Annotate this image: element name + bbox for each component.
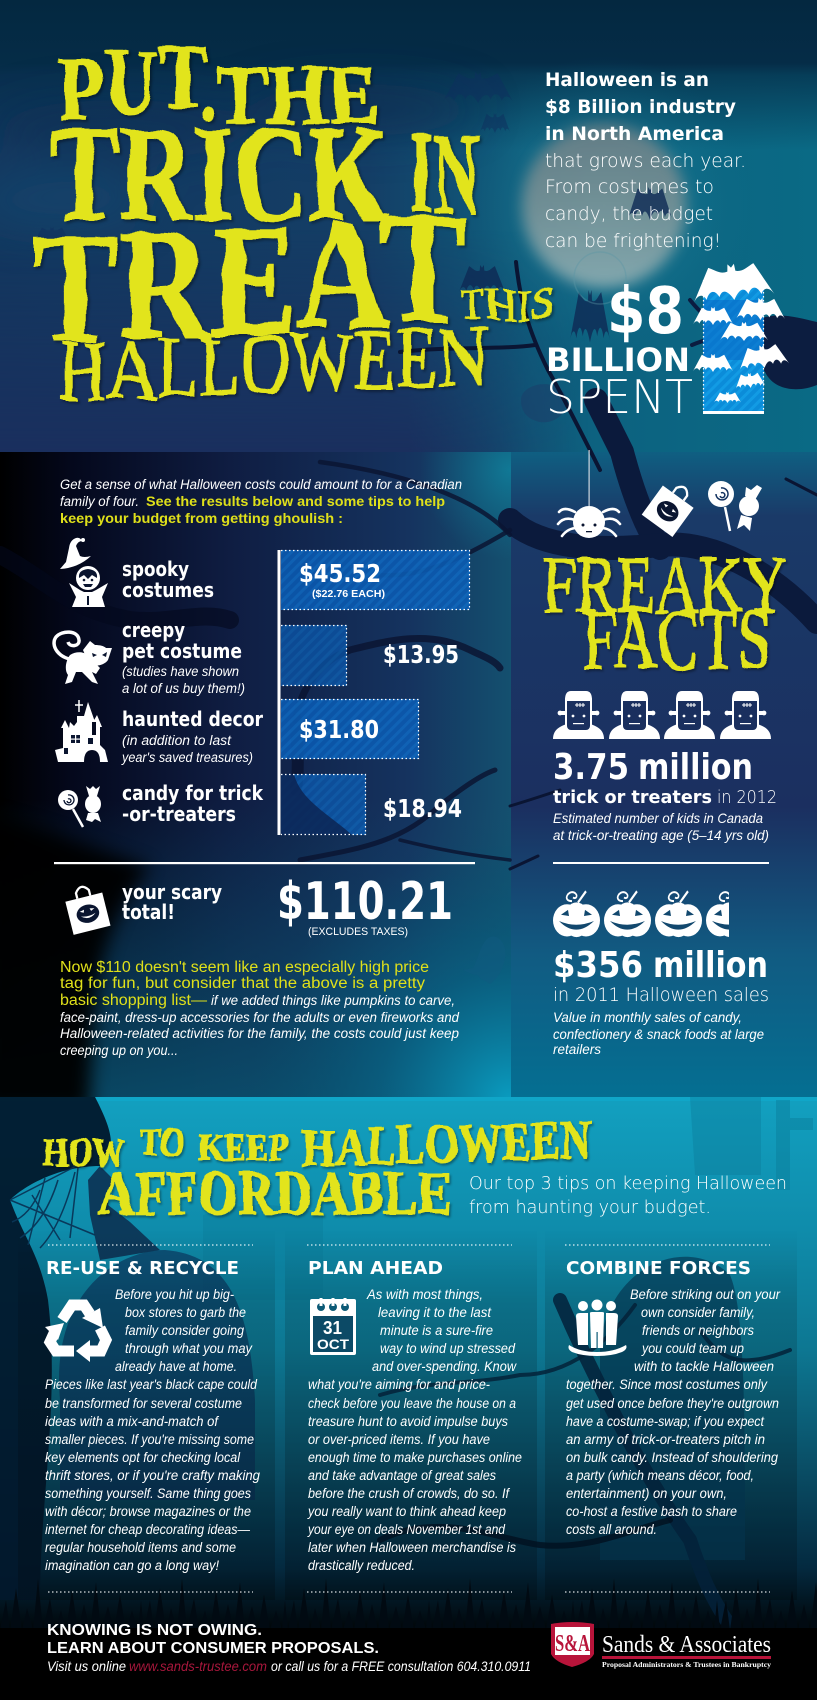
category: creepy pet costume: (studies have shown (122, 664, 239, 679)
column: combine forces (566, 1258, 780, 1537)
total: your scary total (122, 872, 453, 938)
total: your scary total: your scary (122, 880, 222, 904)
text: recycle tip: internet for cheap decorating ideas— (45, 1522, 250, 1537)
text: recycle tip: imagination can go a long way! (45, 1558, 219, 1573)
stat: 3.75 million trick or treaters: trick or treaters (553, 787, 712, 808)
stat: 3.75 million trick or treaters: million (638, 747, 753, 788)
logo: Sands and Associates: Proposal Administrators & Trustees in Bankruptcy (602, 1660, 771, 1669)
category: haunted decor (121, 707, 263, 765)
text: combine forces tip: together. Since most costumes only (566, 1377, 768, 1392)
panel: freaky facts background (511, 452, 817, 1097)
text: plan ahead tip: you really want to think ahead keep (307, 1504, 506, 1519)
total: your scary total: (EXCLUDES TAXES) (308, 926, 408, 938)
text: recycle tip: family consider going (125, 1323, 244, 1338)
bar: costumes: $45.52 (299, 559, 381, 588)
background: night sky header (0, 0, 817, 452)
category: spooky costumes (122, 557, 214, 602)
text: plan ahead tip: and over-spending. Know (372, 1359, 517, 1374)
column: plan ahead (307, 1258, 522, 1573)
text block: cost intro: family of four. (60, 494, 139, 509)
heading: re-use and recycle: RE-USE & RECYCLE (46, 1258, 239, 1279)
heading: How to keep Halloween affordable: HALLOWEEN (302, 1109, 591, 1178)
icon row: Frankenstein kids (553, 691, 771, 739)
text: plan ahead tip: later when Halloween merchandise is (308, 1540, 516, 1555)
text: recycle tip: regular household items and some (45, 1540, 236, 1555)
text: recycle tip: through what you may (125, 1341, 253, 1356)
text: plan ahead tip: As with most things, (366, 1287, 483, 1302)
bar chart: cost per category (278, 550, 470, 835)
bar: candy: $18.94 (383, 794, 462, 823)
text: plan ahead tip: check before you leave the house on a (308, 1396, 516, 1411)
icon: faint ghost (463, 936, 506, 984)
text: plan ahead tip: what you're aiming for and price- (308, 1377, 490, 1392)
text: combine forces tip: on bulk candy. Instead of shouldering (566, 1450, 778, 1465)
title: Put the Trick in Treat this Halloween: IN (409, 108, 479, 239)
heading: plan ahead: PLAN AHEAD (308, 1258, 443, 1279)
text block: cost intro: keep your budget from getting ghoulish : (60, 511, 343, 526)
icon: shopping bag (63, 882, 110, 935)
text: combine forces tip: own consider family, (641, 1305, 755, 1320)
bar: decor: $31.80 (299, 715, 379, 744)
title: Put the Trick in Treat this Halloween: HALLOWEEN (58, 308, 487, 419)
text: recycle tip: key elements opt for checking local (45, 1450, 241, 1465)
text block: Halloween industry intro: Halloween is an (545, 69, 709, 91)
category: candy (122, 781, 264, 826)
text block: price commentary (60, 959, 459, 1058)
panel: cost breakdown background (0, 452, 511, 1112)
stat: $8 billion spent with bats: $8 (607, 275, 684, 349)
stat: $356 million in sales: confectionery & snack foods at large (553, 1026, 764, 1042)
stat: $356 million in sales (553, 945, 769, 1057)
text: plan ahead tip: and take advantage of great sales (308, 1468, 496, 1483)
logo: Sands and Associates: Sands & Associates (602, 1632, 771, 1658)
category: creepy pet costume (122, 618, 245, 696)
text: combine forces tip: an army of trick-or-treaters pitch in (566, 1432, 765, 1447)
stat: 3.75 million trick or treaters (553, 747, 777, 843)
heading: Freaky Facts (542, 539, 787, 687)
category: creepy pet costume: pet costume (122, 639, 242, 663)
text: recycle tip: thrift stores, or if you're crafty making (45, 1468, 260, 1483)
text block: Halloween industry intro: in North America (545, 123, 724, 145)
text: combine forces tip: get used once before they're outgrown (566, 1396, 779, 1411)
text block: tips intro (469, 1173, 787, 1218)
text: recycle tip (45, 1287, 260, 1573)
total: your scary total: $110.21 (277, 872, 453, 932)
text: recycle tip: be transformed for several costume (45, 1396, 242, 1411)
footer: call to action (47, 1622, 531, 1674)
text block: price commentary: Halloween-related activities for the family, the costs could just keep (60, 1026, 459, 1041)
text: recycle tip: already have at home. (115, 1359, 237, 1374)
text: combine forces tip: Before striking out on your (630, 1287, 780, 1302)
icon: lollipop and candy (58, 786, 101, 827)
text: combine forces tip: co-host a festive bash to share (566, 1504, 737, 1519)
stat: $356 million in sales: in 2011 Halloween sales (553, 984, 769, 1006)
bar: costumes: ($22.76 EACH) (312, 588, 385, 600)
stat: 3.75 million trick or treaters: Estimated number of kids in Canada (553, 810, 763, 826)
text: combine forces tip: with to tackle Halloween (634, 1359, 774, 1374)
category: spooky costumes: costumes (122, 578, 214, 602)
category: haunted decor: (in addition to last (122, 733, 232, 748)
text: combine forces tip: costs all around. (566, 1522, 657, 1537)
stat: 3.75 million trick or treaters: 3.75 (553, 747, 629, 788)
icon: wrapped candy (737, 485, 762, 531)
text: recycle tip: Pieces like last year's black cape could (45, 1377, 257, 1392)
text block: cost intro (60, 477, 462, 526)
category: creepy pet costume: creepy (122, 618, 185, 642)
text block: cost intro: See the results below and some tips to help (146, 494, 445, 509)
stat: $356 million in sales: million (653, 945, 768, 986)
text block: Halloween industry intro (545, 69, 746, 252)
heading: Freaky Facts: FREAKY (542, 539, 787, 630)
text block: Halloween industry intro: candy, the budget (545, 203, 713, 225)
title: Put the Trick in Treat this Halloween: THIS (460, 278, 555, 329)
text: plan ahead tip: enough time to make purchases online (308, 1450, 522, 1465)
text: plan ahead tip: before the crush of crowds, do so. If (308, 1486, 510, 1501)
text block: price commentary: creeping up on you... (60, 1043, 178, 1058)
text block: price commentary: tag for fun, but consider that the above is a pretty (60, 975, 425, 992)
stat: $356 million in sales: retailers (553, 1041, 601, 1057)
text block: cost intro: Get a sense of what Halloween costs could amount to for a Canadian (60, 477, 462, 492)
background: graveyard section (0, 1097, 817, 1700)
bar: pet costume: $13.95 (383, 640, 459, 669)
icon: witch hat and vampire (60, 538, 108, 607)
text: combine forces tip: entertainment) on your own, (566, 1486, 727, 1501)
stat: $8 billion spent with bats: SPENT (546, 370, 693, 424)
text: plan ahead tip: treasure hunt to avoid impulse buys (308, 1414, 508, 1429)
text block: price commentary: face-paint, dress-up accessories for the adults or even fireworks and (60, 1010, 459, 1025)
icon row: pumpkins (553, 891, 753, 937)
stat: $356 million in sales: $356 (553, 945, 643, 986)
icon: calendar 31 Oct: OCT (317, 1336, 349, 1352)
title: Put the Trick in Treat this Halloween: TRICK (50, 97, 388, 250)
category: haunted decor: year's saved treasures) (121, 750, 253, 765)
title: Put the Trick in Treat this Halloween: PUT (58, 25, 208, 140)
text: plan ahead tip: drastically reduced. (308, 1558, 415, 1573)
icon: hanging spider (558, 450, 620, 538)
text block: Halloween industry intro: $8 Billion industry (545, 96, 737, 118)
text block: Halloween industry intro: can be frightening! (545, 230, 721, 252)
text: recycle tip: ideas with a mix-and-match of (45, 1414, 219, 1429)
stat: 3.75 million trick or treaters: at trick-or-treating age (5–14 yrs old) (553, 827, 769, 843)
text block: price commentary: Now $110 doesn't seem like an especially high price (60, 959, 429, 976)
title: Put the Trick in Treat this Halloween (32, 25, 555, 419)
icon: group of people (568, 1300, 626, 1356)
heading: How to keep Halloween affordable: HOW (43, 1130, 125, 1175)
text block: price commentary: basic shopping list— (60, 992, 208, 1009)
icon: tilted bag (642, 477, 700, 537)
category: haunted decor: haunted decor (122, 707, 263, 731)
footer: call to action: Visit us online (47, 1659, 126, 1674)
text: plan ahead tip: leaving it to the last (378, 1305, 492, 1320)
logo: Sands and Associates (551, 1622, 771, 1669)
text: recycle tip: with décor; browse magazines or the (45, 1504, 251, 1519)
category: candy: candy for trick (122, 781, 264, 805)
text block: tips intro: from haunting your budget. (469, 1197, 711, 1218)
icon: haunted castle (55, 700, 108, 762)
text: plan ahead tip: or over-priced items. If you have (308, 1432, 490, 1447)
text: plan ahead tip: minute is a sure-fire (380, 1323, 493, 1338)
column: re-use and recycle (45, 1258, 260, 1573)
text: combine forces tip: have a costume-swap; if you expect (566, 1414, 765, 1429)
heading: combine forces: COMBINE FORCES (566, 1258, 751, 1279)
bar: candy (281, 774, 462, 835)
text: plan ahead tip: way to wind up stressed (380, 1341, 515, 1356)
text block: price commentary: if we added things like pumpkins to carve, (211, 993, 455, 1008)
footer: call to action: LEARN ABOUT CONSUMER PROPOSALS. (47, 1640, 379, 1657)
chart: bat column (690, 260, 789, 414)
text: recycle tip: something yourself. Same thing goes (45, 1486, 251, 1501)
category: candy: -or-treaters (122, 802, 236, 826)
heading: How to keep Halloween affordable: AFFORDABLE (98, 1160, 452, 1228)
text: recycle tip: smaller pieces. If you're missing some (45, 1432, 254, 1447)
stat: 3.75 million trick or treaters: in 2012 (717, 787, 777, 808)
heading: How to keep Halloween affordable: TO (140, 1122, 185, 1164)
text: combine forces tip: friends or neighbors (642, 1323, 754, 1338)
footer: call to action: KNOWING IS NOT OWING. (47, 1622, 262, 1639)
bar: pet costume (281, 625, 459, 686)
icon: lollipop (708, 481, 734, 531)
text block: Halloween industry intro: that grows each year. (545, 150, 746, 172)
text block: Halloween industry intro: From costumes to (545, 176, 714, 198)
stat: $8 billion spent with bats (546, 260, 789, 424)
background: grass silhouette and footer (0, 1570, 817, 1700)
icon: recycle arrows (45, 1305, 106, 1362)
total: your scary total: total! (122, 900, 175, 924)
bar: decor (281, 699, 419, 759)
text: recycle tip: Before you hit up big- (115, 1287, 234, 1302)
heading: How to keep Halloween affordable (43, 1109, 591, 1228)
category: creepy pet costume: a lot of us buy them!) (122, 681, 245, 696)
bar: costumes (281, 550, 470, 610)
icon: calendar 31 Oct (310, 1298, 356, 1355)
text: combine forces tip: a party (which means décor, food, (566, 1468, 754, 1483)
stat: $8 billion spent with bats: BILLION (546, 341, 690, 379)
text: combine forces tip (566, 1287, 780, 1537)
text: plan ahead tip (307, 1287, 522, 1573)
footer: call to action: or call us for a FREE consultation 604.310.0911 (271, 1659, 531, 1674)
title: Put the Trick in Treat this Halloween: TREAT (32, 179, 466, 377)
text block: tips intro: Our top 3 tips on keeping Halloween (469, 1173, 787, 1194)
text: recycle tip: box stores to garb the (125, 1305, 246, 1320)
logo: Sands and Associates: S&A (555, 1631, 590, 1657)
stat: $356 million in sales: Value in monthly sales of candy, (553, 1009, 742, 1025)
text: combine forces tip: you could team up (641, 1341, 744, 1356)
limb end: dark branch behind bats (755, 315, 817, 389)
icon: calendar 31 Oct: 31 (323, 1318, 342, 1338)
text: plan ahead tip: your eye on deals November 1st and (307, 1522, 505, 1537)
icon: black cat (54, 632, 112, 684)
heading: How to keep Halloween affordable: KEEP (198, 1127, 289, 1169)
footer: call to action: www.sands-trustee.com (129, 1659, 267, 1674)
category: spooky costumes: spooky (122, 557, 189, 581)
title: Put the Trick in Treat this Halloween: THE (216, 47, 379, 143)
